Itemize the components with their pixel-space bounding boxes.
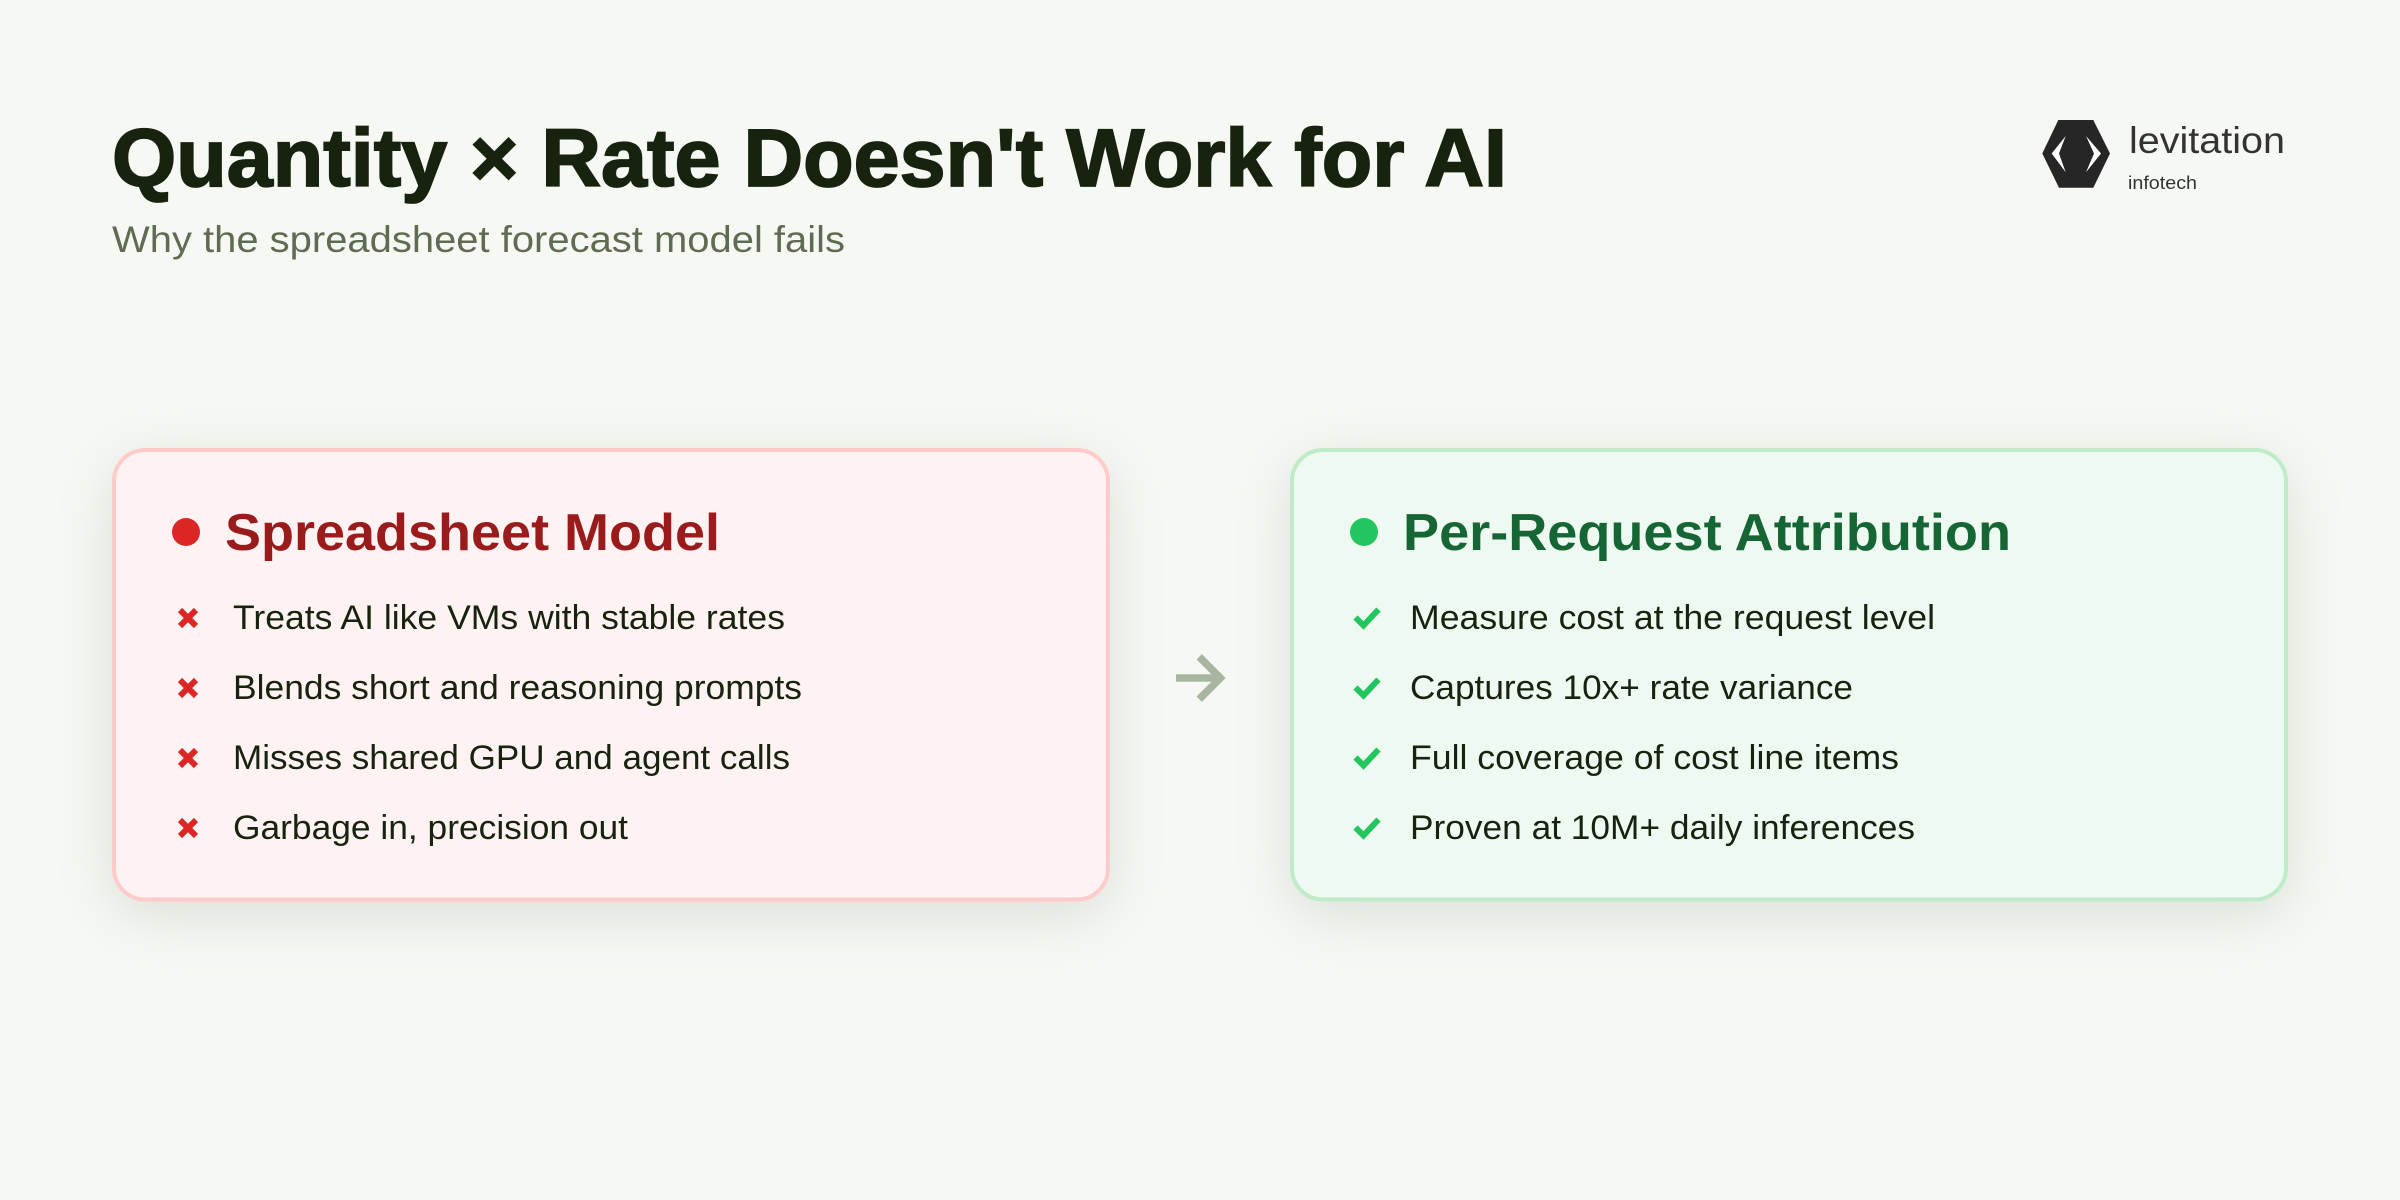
list row 2: Blends short and reasoning prompts — [233, 669, 802, 707]
list row 2: Captures 10x+ rate variance — [1410, 669, 1853, 707]
heading: spreadsheet model: Spreadsheet Model — [225, 504, 720, 562]
arrow — [1176, 657, 1220, 699]
logo wordmark: levitation — [2129, 120, 2285, 161]
title: Quantity × Rate Doesn't Work for AI — [112, 113, 1507, 204]
icon: hexagon logo mark — [2042, 120, 2110, 188]
list row 3: Misses shared GPU and agent calls — [233, 739, 790, 777]
list row 4: Garbage in, precision out — [233, 809, 629, 847]
list row 4: Proven at 10M+ daily inferences — [1410, 809, 1915, 847]
logo: levitation infotech — [2042, 120, 2285, 193]
heading: per-request attribution: Per-Request Attribution — [1403, 504, 2011, 562]
icon: red status dot — [172, 518, 200, 546]
list row 1: Measure cost at the request level — [1410, 599, 1935, 637]
subtitle: Why the spreadsheet forecast model fails — [112, 219, 845, 260]
panel background — [114, 450, 1108, 900]
panel background — [1292, 450, 2286, 900]
list row 1: Treats AI like VMs with stable rates — [233, 599, 785, 637]
panel: per-request attribution — [1292, 450, 2286, 900]
icon: green status dot — [1350, 518, 1378, 546]
logo sub-wordmark: infotech — [2128, 173, 2197, 193]
panel: spreadsheet model — [114, 450, 1108, 900]
list row 3: Full coverage of cost line items — [1410, 739, 1899, 777]
